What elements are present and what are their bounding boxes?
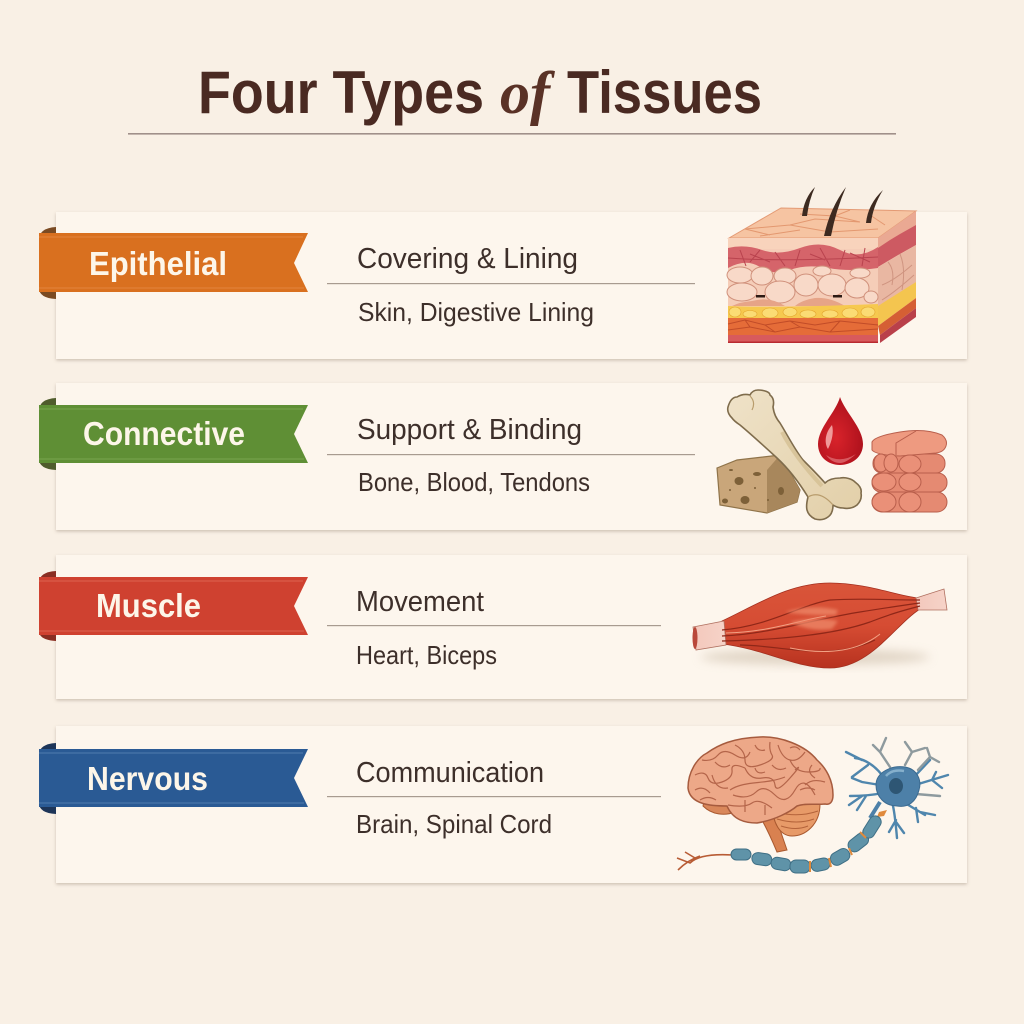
ribbon: muscle: Muscle xyxy=(96,587,201,624)
ribbon: connective: Connective xyxy=(83,415,245,452)
ribbon: nervous xyxy=(39,743,308,814)
text: muscle examples: Heart, Biceps xyxy=(356,640,497,670)
icon: tendon bundle xyxy=(872,431,947,512)
panel: nervous xyxy=(39,726,967,883)
title: Four Types xyxy=(198,59,484,126)
ribbon: connective xyxy=(39,398,308,470)
text: connective function: Support & Binding xyxy=(357,414,582,446)
text: muscle function: Movement xyxy=(356,586,484,618)
text: connective examples: Bone, Blood, Tendons xyxy=(358,467,590,497)
icon: blood drop xyxy=(818,397,863,465)
icon: long bone xyxy=(728,390,861,520)
icon: skin block xyxy=(727,187,916,343)
text: epithelial function: Covering & Lining xyxy=(357,243,578,275)
title: Tissues xyxy=(567,59,762,126)
text: nervous examples: Brain, Spinal Cord xyxy=(356,809,552,839)
title xyxy=(198,59,762,126)
icon: muscle xyxy=(692,583,947,668)
text: epithelial examples: Skin, Digestive Lining xyxy=(358,297,594,327)
ribbon: epithelial xyxy=(39,227,308,299)
ribbon: muscle xyxy=(39,571,308,641)
panel: muscle xyxy=(39,555,967,699)
text: nervous function: Communication xyxy=(356,757,544,789)
icon: spongy bone xyxy=(717,455,800,513)
ribbon: epithelial: Epithelial xyxy=(89,245,227,282)
panel: connective xyxy=(39,383,967,530)
ribbon: nervous: Nervous xyxy=(87,760,208,797)
icon: neuron xyxy=(677,738,948,873)
title: of xyxy=(500,60,555,126)
panel: epithelial xyxy=(39,187,967,359)
icon: brain xyxy=(688,737,833,852)
